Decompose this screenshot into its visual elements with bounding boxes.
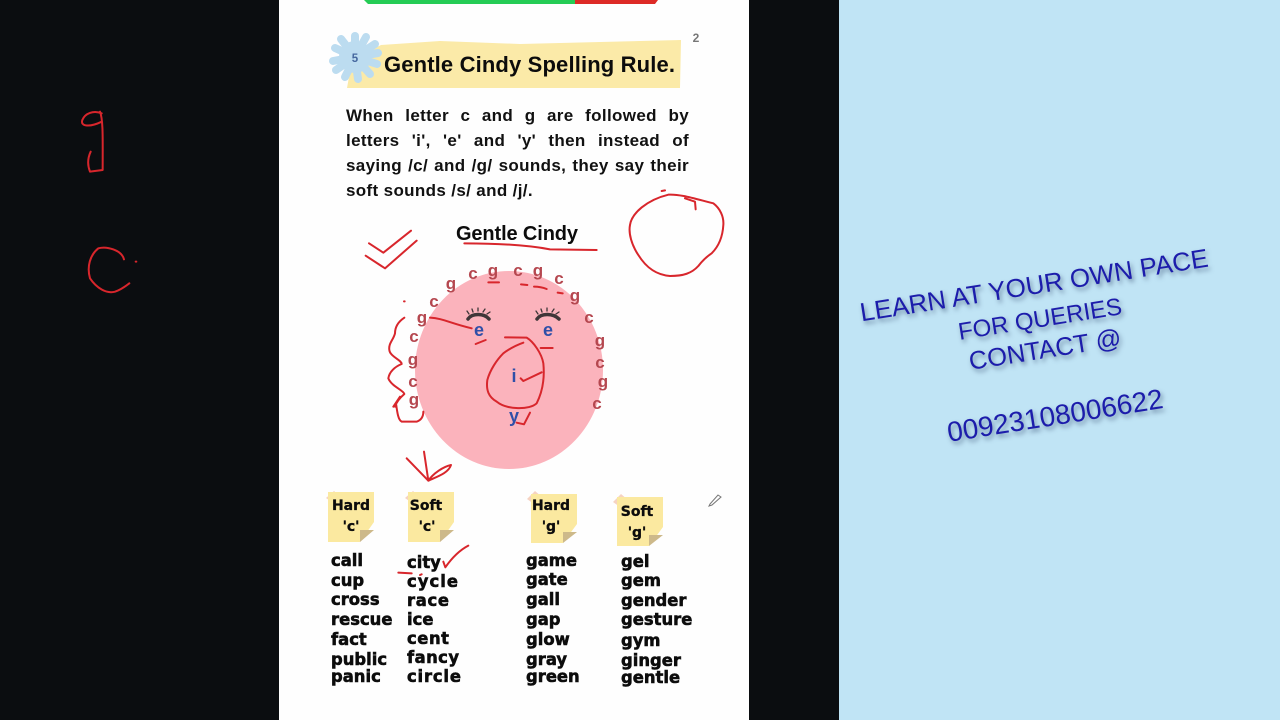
- ring of letters c and g: c: [408, 372, 418, 391]
- contact message: FOR QUERIES: [956, 293, 1124, 346]
- progress bar: [364, 0, 658, 4]
- word list: hard c: rescue: [331, 610, 392, 629]
- rule explanation text: [346, 106, 689, 200]
- handwritten letters g and c: [82, 112, 136, 292]
- rule explanation text: When letter c and g are followed by: [346, 106, 689, 125]
- word list: soft g: gem: [621, 571, 661, 590]
- contact message: 00923108006622: [945, 383, 1165, 448]
- ring of letters c and g: g: [488, 261, 498, 280]
- word list: hard g: gap: [526, 610, 561, 629]
- word list: soft c: ice: [407, 610, 433, 629]
- ring of letters c and g: c: [468, 264, 478, 283]
- white worksheet page: [279, 0, 749, 720]
- word list: hard c: panic: [331, 667, 381, 686]
- ring of letters c and g: g: [417, 308, 427, 327]
- word list: hard g: gray: [526, 650, 567, 669]
- word list: soft g: ginger: [621, 651, 682, 670]
- eyelashes: [467, 308, 559, 319]
- icon: pencil cursor: [709, 495, 721, 506]
- ring of letters c and g: g: [446, 274, 456, 293]
- word list: soft c: circle: [407, 667, 461, 686]
- ring of letters c and g: g: [570, 286, 580, 305]
- word list: soft g: gesture: [621, 610, 692, 629]
- blue vowels e e i y: y: [509, 406, 519, 426]
- word list: hard g: game: [526, 551, 577, 570]
- ring of letters c and g: c: [584, 308, 594, 327]
- word list: hard g: green: [526, 667, 580, 686]
- blue vowels e e i y: i: [511, 366, 517, 386]
- ring of letters c and g: c: [513, 261, 523, 280]
- subheading: Gentle Cindy: Gentle Cindy: [456, 223, 579, 245]
- ring of letters c and g: g: [409, 390, 419, 409]
- word list: hard c: cup: [331, 571, 364, 590]
- word list: soft c: city: [407, 553, 441, 572]
- word list: hard c: [331, 551, 392, 686]
- word list: hard g: gate: [526, 570, 568, 589]
- sticky note: Soft g: Soft: [621, 504, 654, 520]
- blue vowels e e i y: [474, 320, 553, 426]
- title highlight band: [347, 40, 681, 88]
- red annotations over the face: [366, 190, 723, 481]
- ring of letters c and g: g: [598, 372, 608, 391]
- word list: hard c: public: [331, 650, 387, 669]
- sticky note: Soft c: 'c': [419, 519, 435, 535]
- sticky note: Hard g: 'g': [542, 519, 560, 535]
- sticky note: Soft g: [613, 494, 663, 546]
- word list: soft c: cent: [407, 629, 449, 648]
- contact message: CONTACT @: [967, 324, 1123, 376]
- word list: hard c: cross: [331, 590, 380, 609]
- sticky note: Hard c: Hard: [332, 498, 370, 514]
- sticky note: Soft c: Soft: [410, 498, 443, 514]
- sticky note: Hard c: 'c': [343, 519, 359, 535]
- sticky note: Hard g: [527, 491, 577, 543]
- word list: hard g: glow: [526, 630, 570, 649]
- rule explanation text: soft sounds /s/ and /j/.: [346, 181, 533, 200]
- word list: soft g: gentle: [621, 668, 680, 687]
- sticky note: Hard g: Hard: [532, 498, 570, 514]
- word list: soft c: cycle: [407, 572, 458, 591]
- ring of letters c and g: g: [595, 331, 605, 350]
- page number: 2: [693, 31, 700, 45]
- rule explanation text: letters 'i', 'e' and 'y' then instead of: [346, 131, 689, 150]
- ring of letters c and g: c: [595, 353, 605, 372]
- ring of letters c and g: c: [409, 327, 419, 346]
- contact message: [858, 243, 1210, 448]
- ring of letters c and g: c: [554, 269, 564, 288]
- word list: hard g: gall: [526, 590, 560, 609]
- badge: number 5: [333, 36, 378, 79]
- word list: hard c: fact: [331, 630, 367, 649]
- word list: hard c: call: [331, 551, 363, 570]
- face circle: [415, 271, 603, 469]
- blue vowels e e i y: e: [543, 320, 553, 340]
- word list: soft g: gender: [621, 591, 687, 610]
- badge: number 5: 5: [352, 53, 359, 65]
- word list: soft c: fancy: [407, 648, 459, 667]
- word list: soft g: gym: [621, 631, 660, 650]
- ring of letters c and g: g: [533, 261, 543, 280]
- ring of letters c and g: [408, 261, 608, 413]
- word list: soft g: gel: [621, 552, 649, 571]
- contact message: LEARN AT YOUR OWN PACE: [858, 243, 1210, 327]
- sticky note: Soft c: [405, 491, 454, 542]
- red tick on city: [398, 546, 468, 575]
- word list: soft g: [621, 552, 692, 687]
- word list: hard g: [526, 551, 580, 686]
- word list: soft c: [407, 553, 461, 686]
- light blue contact panel: [839, 0, 1280, 720]
- sticky note: Soft g: 'g': [628, 525, 646, 541]
- ring of letters c and g: c: [592, 394, 602, 413]
- blue vowels e e i y: e: [474, 320, 484, 340]
- word list: soft c: race: [407, 591, 449, 610]
- rule explanation text: saying /c/ and /g/ sounds, they say their: [346, 156, 689, 175]
- title: Gentle Cindy Spelling Rule.: [384, 52, 675, 77]
- ring of letters c and g: g: [408, 350, 418, 369]
- sticky note: Hard c: [326, 491, 374, 542]
- ring of letters c and g: c: [429, 292, 439, 311]
